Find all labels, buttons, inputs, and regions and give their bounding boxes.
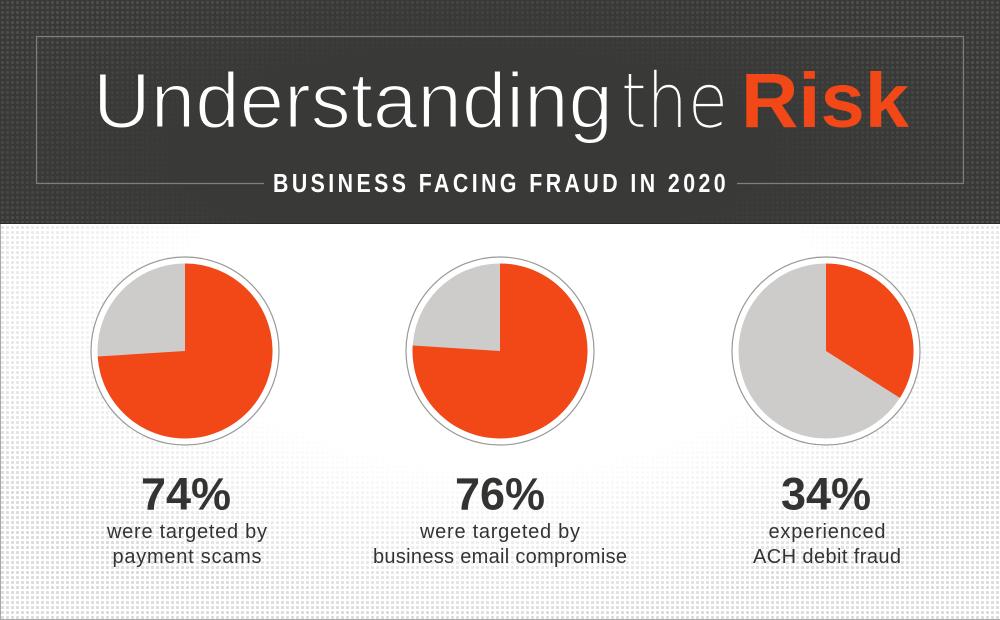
header frame [36,36,964,184]
panel: payment scams [91,257,279,568]
stat: 76%: 76% [455,468,545,520]
stat: 34%: 34% [781,468,871,520]
panel: ACH debit fraud [732,257,920,568]
description: business email compromise: were targeted by [419,521,580,543]
header panel [0,0,1000,224]
content background [0,224,1000,620]
title: Risk [741,58,909,144]
panel: business email compromise [373,257,627,568]
pie chart: 34% [732,257,920,445]
description: business email compromise: business email compromise [373,546,627,568]
description: ACH debit fraud: experienced [768,521,886,543]
pie chart: 76% [406,257,594,445]
description: payment scams: payment scams [112,546,262,568]
pie chart: 74% [91,257,279,445]
title: the [621,56,728,145]
description: payment scams: were targeted by [106,521,267,543]
description: ACH debit fraud: ACH debit fraud [753,546,901,568]
title: Understanding [93,56,613,144]
stat: 74%: 74% [141,468,231,520]
title [93,56,909,145]
subtitle: BUSINESS FACING FRAUD IN 2020 [273,169,726,199]
